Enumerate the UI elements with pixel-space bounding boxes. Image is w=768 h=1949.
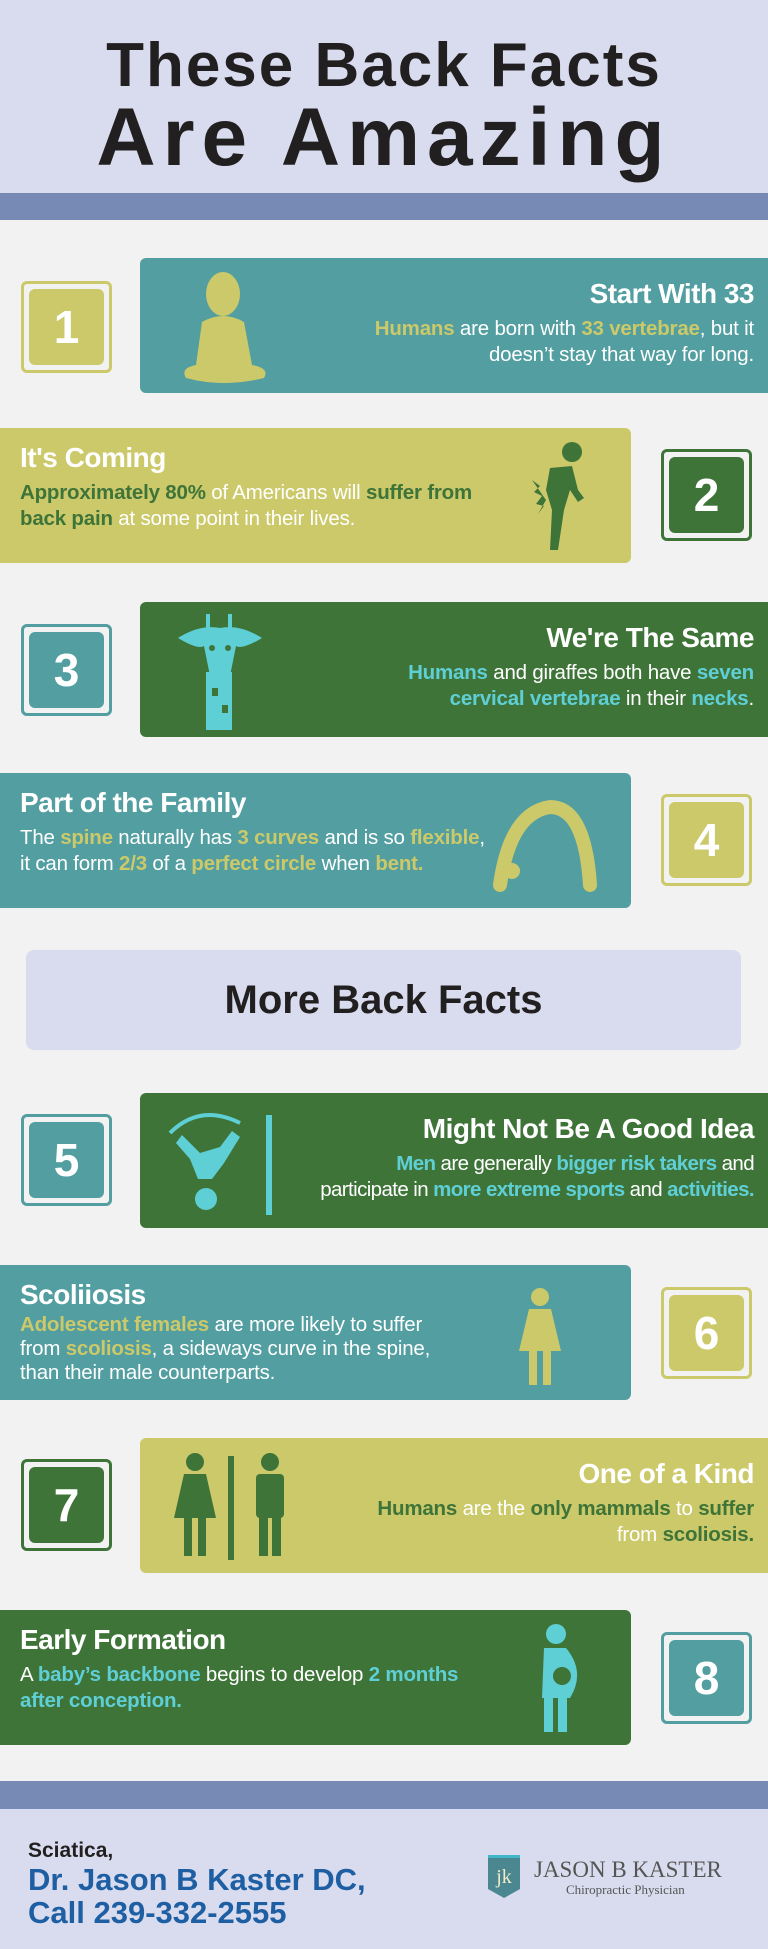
panel 4: it can form 2/3 of a perfect circle when bent. <box>20 852 423 875</box>
panel 8 <box>0 1610 631 1745</box>
section heading box: More Back Facts <box>225 978 542 1022</box>
icon: flipping figure <box>168 1113 272 1215</box>
panel 3: We're The Same <box>546 622 754 653</box>
panel 4: The spine naturally has 3 curves and is so flexible, <box>20 826 485 849</box>
panel 8: after conception. <box>20 1689 182 1712</box>
logo: JASON B KASTER <box>534 1857 722 1882</box>
number box 4: 4 <box>694 814 719 866</box>
title: Are Amazing <box>96 92 672 183</box>
contact text: Call 239-332-2555 <box>28 1895 287 1930</box>
panel 3: Humans and giraffes both have seven <box>408 661 754 684</box>
panel 7: One of a Kind <box>578 1458 754 1489</box>
panel 6: Adolescent females are more likely to suffer <box>20 1313 422 1336</box>
logo: jk <box>495 1866 512 1888</box>
title <box>96 31 672 183</box>
number box 7: 7 <box>54 1479 79 1531</box>
number box 4 <box>661 794 752 886</box>
panel 2: back pain at some point in their lives. <box>20 507 355 530</box>
number box 3: 3 <box>54 644 79 696</box>
contact text <box>28 1839 366 1930</box>
panel 4 <box>0 773 631 908</box>
number box 1 <box>21 281 112 373</box>
panel 1 <box>140 258 768 393</box>
panel 5: Men are generally bigger risk takers and <box>396 1152 754 1175</box>
title: These Back Facts <box>106 31 662 100</box>
icon: giraffe <box>178 614 262 730</box>
panel 7: Humans are the only mammals to suffer <box>377 1497 754 1520</box>
title band <box>0 0 768 193</box>
icon: backbend figure <box>493 800 597 892</box>
panel 1: Humans are born with 33 vertebrae, but it <box>375 317 754 340</box>
icon: female and male figures <box>174 1453 284 1560</box>
panel 1: Start With 33 <box>590 278 754 309</box>
logo <box>488 1855 722 1898</box>
panel 5 <box>140 1093 768 1228</box>
panel 3 <box>140 602 768 737</box>
icon: back pain figure <box>532 442 584 550</box>
icon: female figure <box>519 1288 561 1385</box>
panel 2: Approximately 80% of Americans will suffer from <box>20 481 472 504</box>
number box 8: 8 <box>694 1652 719 1704</box>
panel 8: Early Formation <box>20 1624 226 1655</box>
panel 7 <box>140 1438 768 1573</box>
number box 7 <box>21 1459 112 1551</box>
contact text: Sciatica, <box>28 1839 113 1862</box>
number box 3 <box>21 624 112 716</box>
panel 3: cervical vertebrae in their necks. <box>450 687 754 710</box>
number box 5 <box>21 1114 112 1206</box>
contact text: Dr. Jason B Kaster DC, <box>28 1862 366 1897</box>
panel 5: Might Not Be A Good Idea <box>423 1113 754 1144</box>
icon: sitting baby <box>184 272 266 383</box>
number box 8 <box>661 1632 752 1724</box>
panel 5: participate in more extreme sports and activities. <box>320 1178 754 1201</box>
number box 6 <box>661 1287 752 1379</box>
section heading box <box>26 950 741 1050</box>
panel 6: Scoliiosis <box>20 1279 146 1310</box>
panel 6 <box>0 1265 631 1400</box>
panel 2: It's Coming <box>20 442 166 473</box>
icon: pregnant figure <box>542 1624 578 1732</box>
footer <box>0 1809 768 1949</box>
number box 1: 1 <box>54 301 79 353</box>
logo: Chiropractic Physician <box>566 1882 685 1897</box>
panel 7: from scoliosis. <box>617 1523 754 1546</box>
number box 2: 2 <box>694 469 719 521</box>
panel 1: doesn’t stay that way for long. <box>489 343 754 366</box>
panel 2 <box>0 428 631 563</box>
number box 6: 6 <box>694 1307 719 1359</box>
number box 2 <box>661 449 752 541</box>
panel 8: A baby’s backbone begins to develop 2 months <box>20 1663 458 1686</box>
panel 4: Part of the Family <box>20 787 246 818</box>
number box 5: 5 <box>54 1134 79 1186</box>
panel 6: from scoliosis, a sideways curve in the spine, <box>20 1337 430 1360</box>
panel 6: than their male counterparts. <box>20 1361 275 1384</box>
